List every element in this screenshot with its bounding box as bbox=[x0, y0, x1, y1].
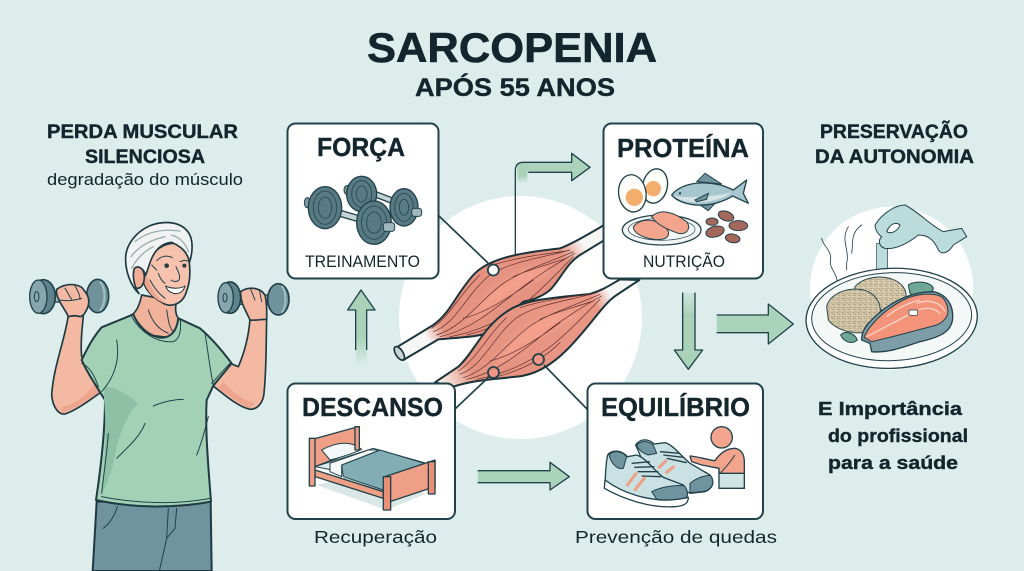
hair bbox=[126, 223, 192, 294]
muscle: lower bbox=[435, 279, 639, 387]
arms bbox=[52, 315, 102, 414]
arrow: proteína down to equilíbrio bbox=[674, 293, 703, 369]
label: nutrição: NUTRIÇÃO bbox=[643, 251, 725, 271]
pants bbox=[93, 502, 212, 571]
connector lines and joints bbox=[439, 216, 587, 409]
caption: recuperação: Recuperação bbox=[314, 527, 437, 547]
heading: descanso: DESCANSO bbox=[302, 392, 443, 422]
plate bbox=[804, 265, 979, 371]
right text: importância do profissional: do profissional bbox=[828, 425, 968, 446]
right heading: preservação da autonomia: PRESERVAÇÃO bbox=[820, 121, 968, 143]
right heading: preservação da autonomia bbox=[815, 121, 974, 168]
icon: bed bbox=[309, 427, 435, 510]
heading: equilíbrio: EQUILÍBRIO bbox=[601, 392, 750, 422]
heading: força: FORÇA bbox=[317, 132, 405, 162]
icon: left dumbbell bbox=[30, 279, 109, 314]
illustration: meal plate with salmon and hand bbox=[804, 205, 979, 371]
right heading: preservação da autonomia: DA AUTONOMIA bbox=[815, 147, 974, 168]
panel: proteína bbox=[604, 124, 763, 278]
icon: person supporting bbox=[690, 427, 744, 488]
icon: sneakers bbox=[604, 440, 713, 507]
right text: importância do profissional bbox=[818, 398, 968, 473]
face bbox=[150, 256, 189, 298]
greens bbox=[908, 282, 933, 296]
heading: proteína: PROTEÍNA bbox=[617, 133, 749, 163]
icon: right dumbbell bbox=[218, 282, 289, 315]
title bbox=[367, 24, 657, 102]
icon: dumbbells bbox=[304, 176, 422, 244]
arrow: muscle to proteína bbox=[515, 153, 590, 255]
left heading: perda muscular silenciosa: SILENCIOSA bbox=[85, 146, 205, 168]
arrow: proteína to autonomia bbox=[717, 304, 793, 344]
panel: equilíbrio bbox=[575, 384, 777, 547]
arrow: descanso to equilíbrio bbox=[478, 462, 569, 490]
front shoe bbox=[605, 451, 687, 504]
right text: importância do profissional: E Importância bbox=[818, 398, 963, 419]
rice mounds bbox=[855, 277, 906, 310]
salmon steak bbox=[862, 292, 953, 352]
arrow: descanso up to força bbox=[348, 290, 375, 367]
joint markers bbox=[488, 264, 544, 378]
head bbox=[126, 223, 192, 305]
muscle illustration bbox=[392, 222, 639, 387]
neck bbox=[132, 295, 178, 338]
left heading: perda muscular silenciosa: degradação do músculo bbox=[47, 170, 243, 189]
icon: protein foods bbox=[616, 166, 748, 245]
label: treinamento: TREINAMENTO bbox=[305, 253, 420, 271]
right text: importância do profissional: para a saúde bbox=[828, 452, 958, 473]
panel: descanso bbox=[288, 384, 455, 547]
muscle: upper bbox=[392, 222, 610, 362]
title: SARCOPENIA bbox=[367, 24, 657, 71]
hand with fork bbox=[875, 205, 967, 280]
left heading: perda muscular silenciosa: PERDA MUSCULAR bbox=[47, 121, 238, 143]
caption: prevenção de quedas: Prevenção de quedas bbox=[575, 527, 777, 547]
left heading: perda muscular silenciosa bbox=[47, 121, 243, 189]
white circle behind muscle bbox=[399, 196, 642, 439]
panel: força bbox=[288, 124, 438, 278]
shirt bbox=[82, 314, 232, 506]
white circle behind plate bbox=[810, 207, 973, 370]
illustration: older man lifting dumbbells bbox=[30, 223, 289, 571]
steam bbox=[822, 225, 862, 285]
title: APÓS 55 ANOS bbox=[415, 72, 615, 102]
back shoe bbox=[636, 440, 713, 493]
hands bbox=[56, 285, 89, 317]
